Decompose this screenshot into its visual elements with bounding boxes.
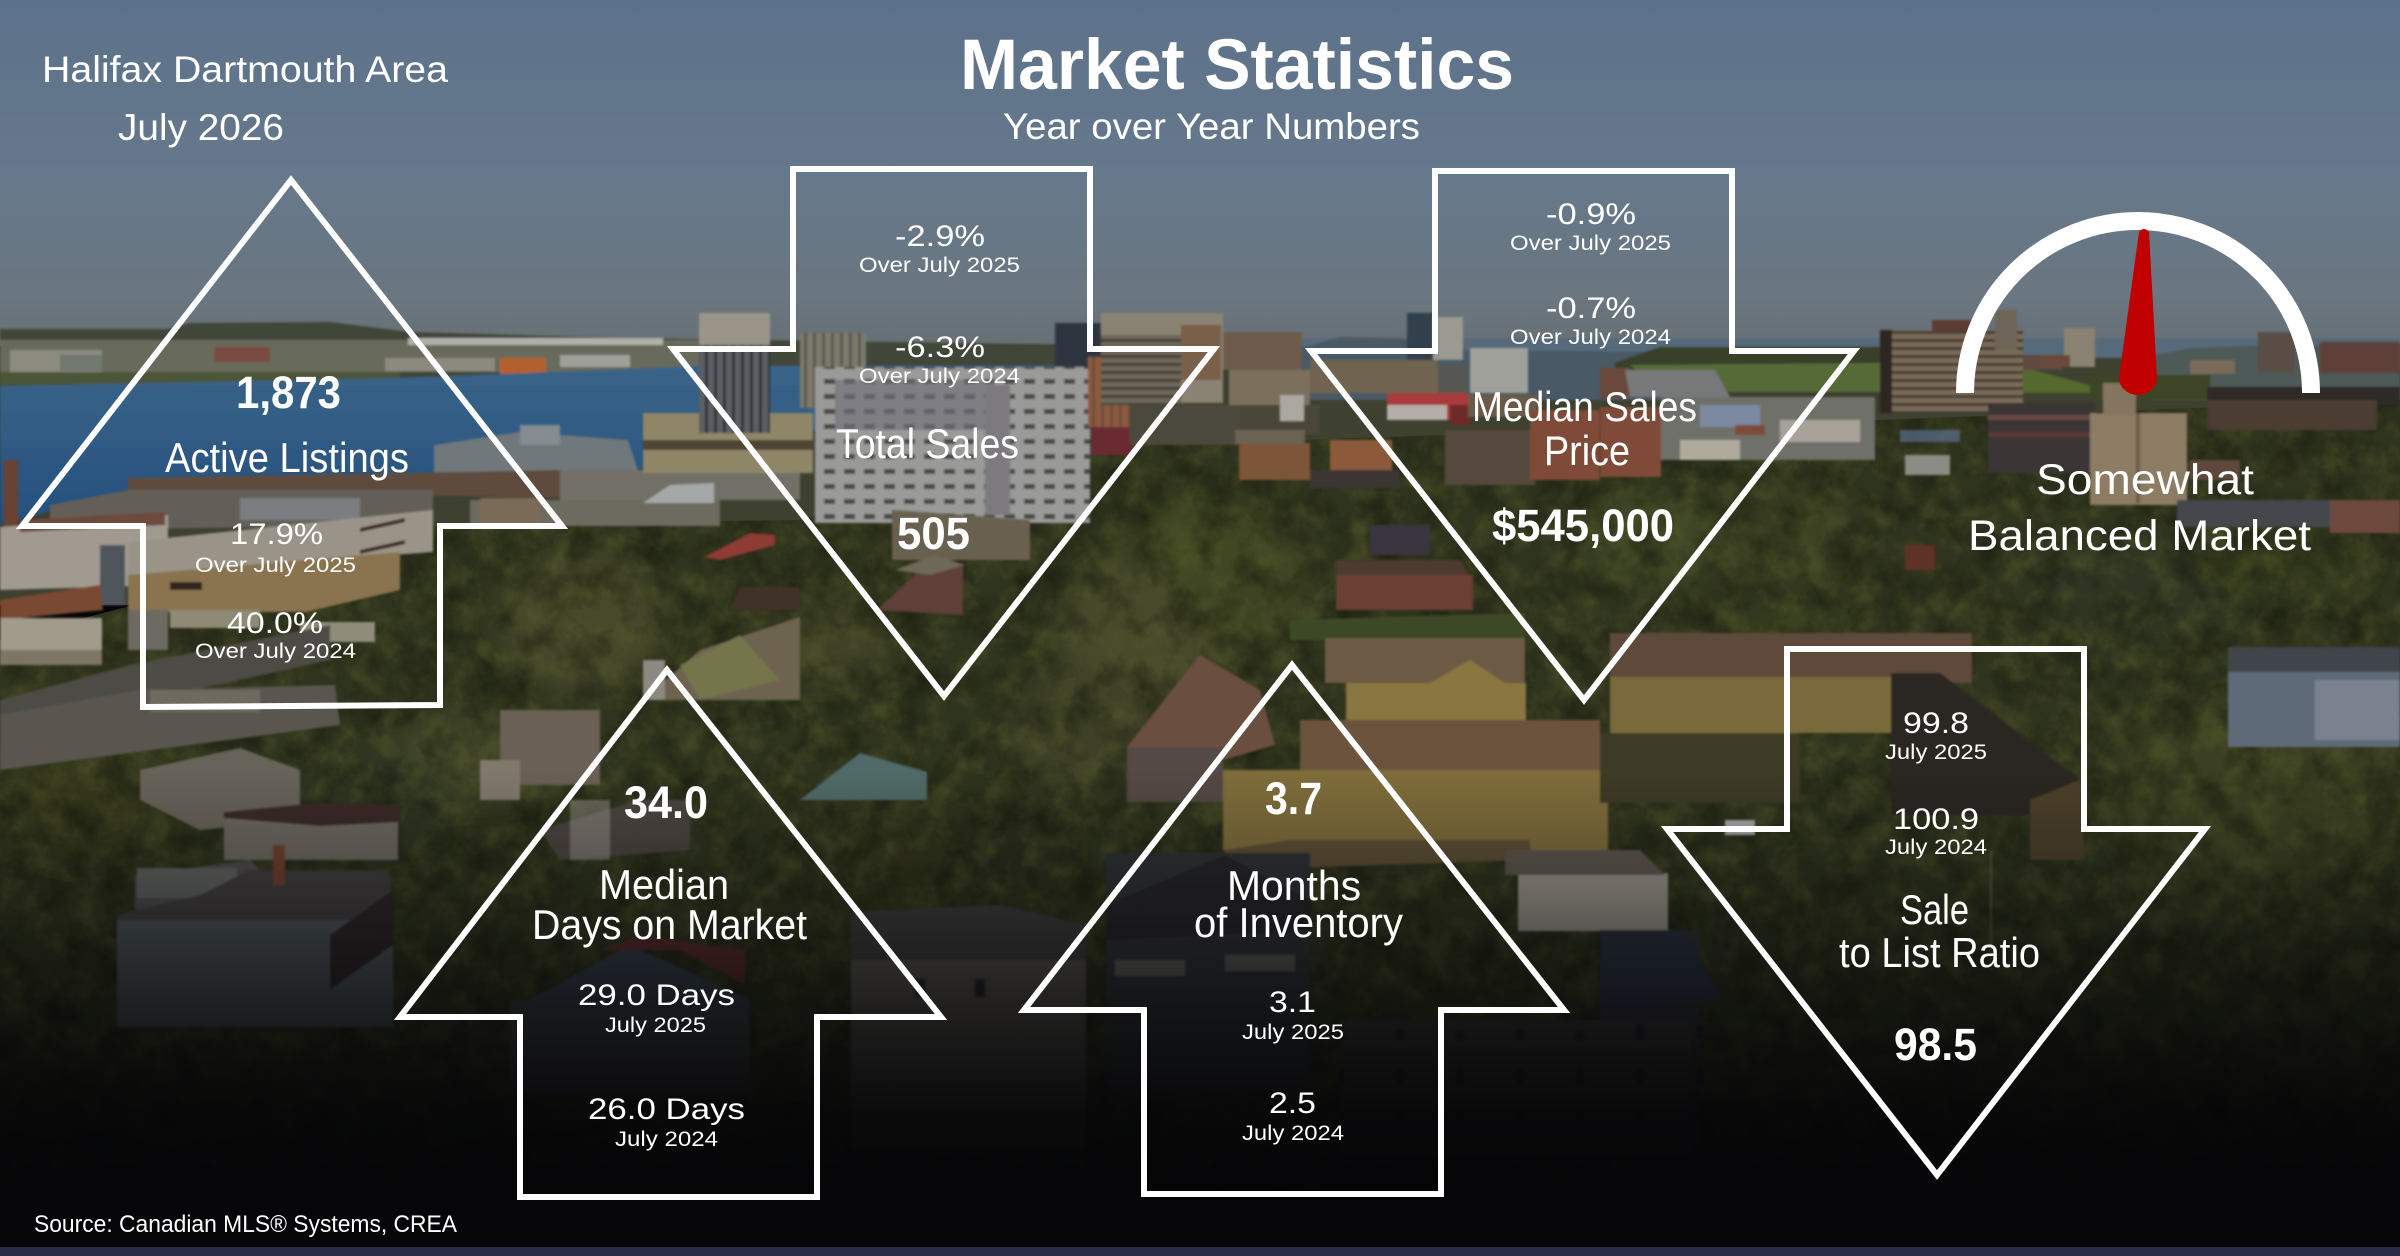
gauge label bbox=[1968, 456, 2311, 560]
change over July 2025: Over July 2025 bbox=[195, 554, 356, 577]
bottom band bbox=[0, 1247, 2400, 1256]
change over July 2025: 17.9% bbox=[230, 518, 323, 551]
panel: total sales down arrow bbox=[673, 169, 1214, 696]
price change over July 2024: Over July 2024 bbox=[1510, 326, 1671, 349]
sale to list ratio value: 98.5 bbox=[1894, 1019, 1977, 1070]
days in July 2025 bbox=[578, 979, 735, 1037]
gauge label: Somewhat bbox=[2036, 456, 2254, 504]
ratio in July 2024: July 2024 bbox=[1885, 836, 1987, 859]
days in July 2024: 26.0 Days bbox=[588, 1093, 745, 1126]
change over July 2024: Over July 2024 bbox=[195, 640, 356, 663]
panel: months of inventory up arrow bbox=[1024, 665, 1564, 1194]
change over July 2025 bbox=[195, 518, 356, 577]
gauge label: Balanced Market bbox=[1968, 512, 2311, 560]
ground under the town bbox=[0, 345, 2400, 605]
inventory in July 2025: July 2025 bbox=[1242, 1021, 1344, 1044]
tree canopy bbox=[0, 400, 2400, 1092]
median sales price label bbox=[1472, 383, 1697, 474]
source note: Source: Canadian MLS® Systems, CREA bbox=[34, 1211, 457, 1238]
days on market label: Days on Market bbox=[532, 901, 807, 948]
price change over July 2025: Over July 2025 bbox=[1510, 232, 1671, 255]
sale to list ratio label bbox=[1839, 886, 2040, 976]
location heading: Halifax Dartmouth Area bbox=[42, 49, 448, 90]
days in July 2024: July 2024 bbox=[615, 1128, 718, 1151]
total sales label: Total Sales bbox=[836, 420, 1019, 467]
location heading: July 2026 bbox=[118, 107, 284, 148]
price change over July 2025 bbox=[1510, 198, 1671, 255]
price change over July 2025: -0.9% bbox=[1546, 198, 1636, 231]
total sales change over July 2024: Over July 2024 bbox=[859, 365, 1020, 388]
days in July 2024 bbox=[588, 1093, 745, 1151]
months of inventory label: Months bbox=[1227, 862, 1361, 909]
shipyard and downtown buildings bbox=[0, 313, 1600, 830]
neighbourhood houses bbox=[117, 510, 2400, 1160]
total sales change over July 2025: -2.9% bbox=[895, 220, 985, 253]
total sales value: 505 bbox=[897, 508, 970, 559]
panel: median sales price down arrow bbox=[1311, 171, 1854, 700]
inventory in July 2025: 3.1 bbox=[1269, 986, 1316, 1019]
price change over July 2024: -0.7% bbox=[1546, 292, 1636, 325]
ratio in July 2025 bbox=[1885, 707, 1987, 764]
gauge needle bbox=[2119, 229, 2157, 395]
total sales change over July 2024 bbox=[859, 331, 1020, 388]
total sales change over July 2025 bbox=[859, 220, 1020, 277]
gauge arc bbox=[1965, 221, 2311, 393]
ratio in July 2024 bbox=[1885, 803, 1987, 859]
subtitle: Year over Year Numbers bbox=[1003, 106, 1420, 147]
months of inventory label bbox=[1194, 862, 1403, 946]
inventory in July 2024: 2.5 bbox=[1269, 1087, 1316, 1120]
title: Market Statistics bbox=[960, 26, 1514, 105]
inventory in July 2024 bbox=[1242, 1087, 1344, 1145]
panel: active listings up arrow bbox=[22, 180, 562, 707]
change over July 2024 bbox=[195, 607, 356, 663]
days on market label bbox=[532, 861, 807, 948]
days in July 2025: 29.0 Days bbox=[578, 979, 735, 1012]
location heading bbox=[42, 49, 448, 148]
days in July 2025: July 2025 bbox=[605, 1014, 706, 1037]
sale to list ratio label: Sale bbox=[1900, 886, 1969, 933]
total sales change over July 2024: -6.3% bbox=[895, 331, 985, 364]
days on market label: Median bbox=[599, 861, 729, 908]
total sales change over July 2025: Over July 2025 bbox=[859, 254, 1020, 277]
months of inventory label: of Inventory bbox=[1194, 899, 1403, 946]
ratio in July 2024: 100.9 bbox=[1893, 803, 1979, 836]
price change over July 2024 bbox=[1510, 292, 1671, 349]
months of inventory value: 3.7 bbox=[1265, 773, 1322, 824]
panel: market balance gauge bbox=[1965, 221, 2311, 560]
ratio in July 2025: 99.8 bbox=[1903, 707, 1969, 740]
sky bbox=[0, 0, 2400, 350]
median sales price label: Price bbox=[1544, 427, 1630, 474]
inventory in July 2025 bbox=[1242, 986, 1344, 1044]
median sales price label: Median Sales bbox=[1472, 383, 1697, 430]
inventory in July 2024: July 2024 bbox=[1242, 1122, 1344, 1145]
active listings value: 1,873 bbox=[236, 367, 341, 418]
change over July 2024: 40.0% bbox=[227, 607, 323, 640]
sale to list ratio label: to List Ratio bbox=[1839, 929, 2040, 976]
active listings label: Active Listings bbox=[165, 434, 409, 481]
median sales price value: $545,000 bbox=[1492, 500, 1674, 551]
panel: sale to list ratio down arrow bbox=[1667, 649, 2205, 1175]
panel: median days on market up arrow bbox=[400, 670, 941, 1197]
harbour and far shore bbox=[0, 322, 2400, 525]
ratio in July 2025: July 2025 bbox=[1885, 741, 1987, 764]
days on market value: 34.0 bbox=[624, 777, 708, 828]
right side skyline bbox=[1600, 310, 2400, 570]
dark bottom fade bbox=[0, 770, 2400, 1200]
